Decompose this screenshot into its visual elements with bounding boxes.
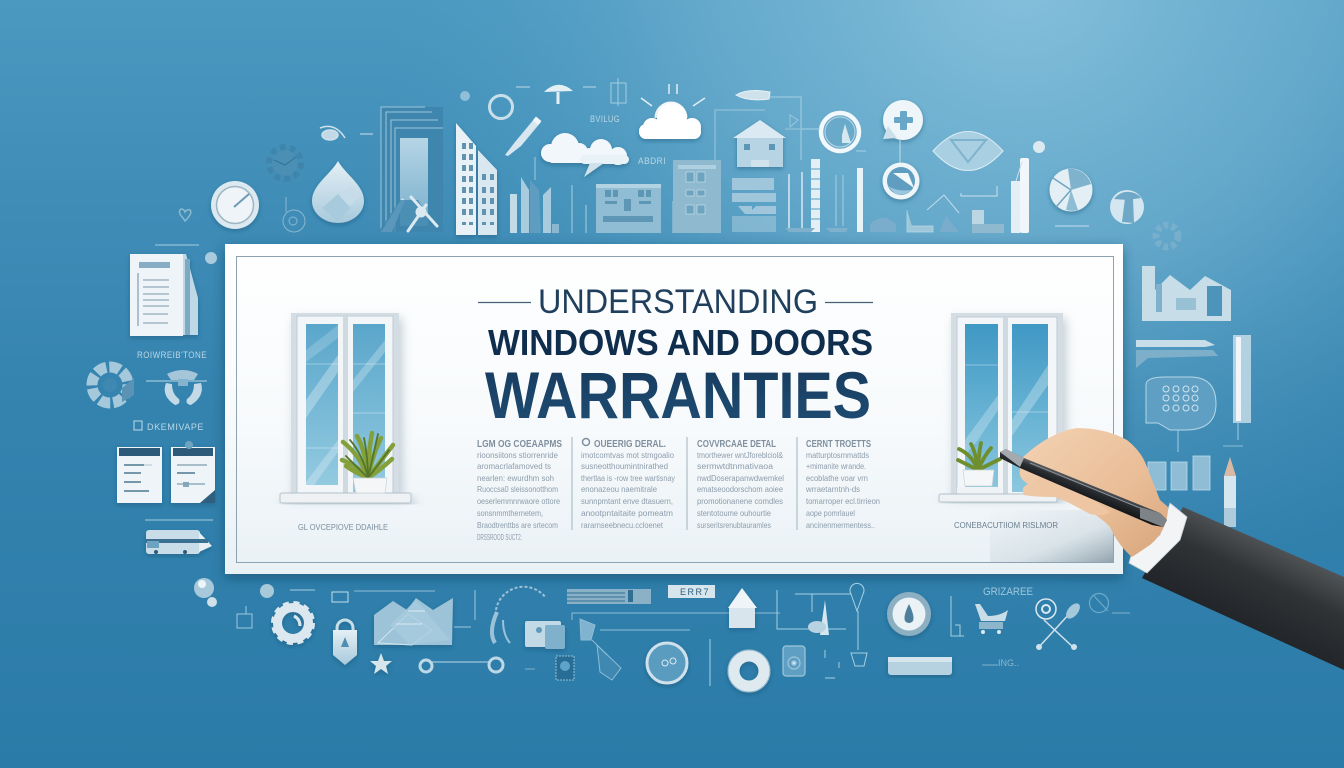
text column 2: OUEERIG DERAL. bbox=[594, 439, 666, 450]
label: ING note: ING.. bbox=[998, 658, 1019, 668]
icon: round mountain badge bbox=[1110, 190, 1144, 224]
text column 3: nwdDoserapanwdwemkel bbox=[697, 473, 784, 483]
text column 2: anootpntaitaite pomeatm bbox=[581, 508, 673, 518]
icon: outlined box bbox=[611, 78, 626, 106]
icon: chip bbox=[332, 591, 435, 602]
icon: compass badge bbox=[882, 162, 920, 200]
icon: door plan bbox=[378, 107, 443, 232]
window: right bbox=[939, 313, 1063, 502]
icon: linked tags bbox=[572, 613, 780, 680]
decorative: short rule bbox=[290, 589, 315, 591]
text column 4: wrraetarntnh-ds bbox=[805, 484, 860, 494]
text column 1: rioonsiitons stiorrenride bbox=[477, 450, 558, 460]
label: error tag: ERR7 bbox=[680, 587, 710, 597]
icon: window stack bbox=[1011, 158, 1029, 233]
caption: right window: CONEBACUTIIOM RISLMOR bbox=[954, 521, 1058, 530]
text column 4: +mimanite wrande. bbox=[806, 461, 866, 471]
icon: twin checklists bbox=[117, 447, 215, 503]
icon: small box bbox=[237, 606, 252, 628]
text column 2: susneotthoumintnirathed bbox=[581, 461, 668, 471]
icon: lifebuoy bbox=[728, 650, 770, 692]
icon: small furniture set bbox=[870, 195, 1004, 233]
text column 3: stentotoume ouhourtie bbox=[697, 508, 771, 518]
icon: server bar bbox=[567, 589, 651, 604]
icon: floor plan stack bbox=[732, 178, 776, 232]
icon: sun over cloud bbox=[639, 84, 705, 139]
icon: eye gauge bbox=[933, 132, 1003, 196]
icon: pen bbox=[505, 117, 541, 156]
label: ING note bbox=[982, 658, 1019, 668]
text column 4 bbox=[805, 439, 880, 530]
text column 3: promotionanene comdles bbox=[697, 496, 783, 506]
icon: shopping cart bbox=[975, 604, 1008, 634]
title: WARRANTIES bbox=[485, 358, 871, 432]
text column 3: surseritsrenubtauramles bbox=[697, 520, 771, 530]
text column 2: thertlaa is -row tree wartisnay bbox=[581, 473, 676, 483]
icon: pencil shelf bbox=[1136, 340, 1218, 368]
icon: house bbox=[733, 120, 786, 167]
icon: document bbox=[130, 254, 198, 336]
icon: gear bbox=[273, 603, 313, 643]
icon: delivery van bbox=[146, 530, 212, 554]
title: UNDERSTANDING bbox=[538, 283, 818, 321]
icon: tall building bbox=[456, 123, 497, 235]
icon: measuring bars bbox=[785, 159, 863, 232]
text column 3: sermwtdtnmativaoa bbox=[697, 461, 773, 471]
icon: ring bbox=[490, 96, 512, 118]
icon group: bottom row of icons bbox=[194, 578, 1130, 692]
icon: apartment block bbox=[596, 184, 673, 233]
icon: paper clip connector bbox=[185, 441, 193, 449]
icon: dark gear bbox=[269, 147, 301, 179]
icon: handshake emblem bbox=[146, 370, 207, 405]
decorative: connector bbox=[454, 590, 475, 627]
decorative: line above document bbox=[155, 244, 199, 246]
text column 1: Ruoccsa0 sleissonotthom bbox=[477, 484, 558, 494]
icon: padlock bbox=[333, 620, 357, 665]
icon: small heart bbox=[179, 209, 191, 221]
icon: folder and tablet bbox=[525, 621, 565, 649]
icon: building panel bbox=[1142, 266, 1231, 321]
icon: foam block bbox=[888, 657, 952, 675]
icon: small blob bbox=[1033, 141, 1045, 153]
icon: city skyline bbox=[510, 157, 586, 233]
title: WINDOWS AND DOORS bbox=[488, 322, 873, 363]
text column 2: rararnseebnecu.ccloenet bbox=[581, 520, 664, 530]
icon: blue person badge bbox=[556, 656, 574, 680]
icon: office building bbox=[673, 160, 721, 233]
icon: pie dial bbox=[1050, 168, 1092, 212]
icon: pliers bbox=[408, 197, 437, 231]
icon: keypad speech bubble bbox=[1146, 377, 1216, 452]
text column 4: ancinenmermentess.. bbox=[806, 520, 875, 530]
text column 1: aromacrlafamoved ts bbox=[477, 461, 551, 471]
text column 1 bbox=[477, 439, 562, 542]
icon: cog with shield bbox=[92, 367, 134, 403]
text column 4: CERNT TROETTS bbox=[806, 439, 871, 450]
text column 3: ematseoodorschom aoiee bbox=[697, 484, 783, 494]
text column 2 bbox=[581, 438, 676, 530]
text column 1: oeserlemmnrwaore ottore bbox=[477, 496, 560, 506]
icon: vertical ruler bbox=[1223, 335, 1251, 446]
thumb bbox=[1036, 478, 1110, 515]
icon: bubbles bbox=[194, 578, 274, 607]
decorative: L rule bbox=[951, 596, 964, 636]
icon: faded no-sign bbox=[1090, 594, 1130, 613]
pen bbox=[1000, 449, 1167, 527]
hand holding pen bbox=[1000, 428, 1344, 670]
icon: thermostat dial bbox=[647, 643, 687, 683]
decorative: dial baseline bbox=[1055, 225, 1089, 227]
text column 1: DRSSROOD SUCT2. bbox=[477, 532, 522, 542]
icon: map fold bbox=[374, 598, 453, 645]
shirt cuff bbox=[1129, 503, 1187, 573]
text column 4: ecoblathe voar vrn bbox=[806, 473, 868, 483]
icon: plus bubble bbox=[883, 100, 923, 140]
icon: umbrella bbox=[516, 85, 596, 104]
icon: teardrop sketch bbox=[808, 600, 829, 635]
text column 1: sonsnmmthernetem, bbox=[477, 508, 543, 518]
icon group: right column of icons bbox=[1136, 266, 1251, 527]
arm sleeve bbox=[1142, 507, 1344, 670]
icon: connector bbox=[899, 140, 901, 163]
text column 2: imotcomtvas mot stmgoalio bbox=[581, 450, 674, 460]
window: left bbox=[280, 313, 411, 503]
text column 1: Braodtrenttbs are srtecom bbox=[477, 520, 558, 530]
label: error tag bbox=[668, 585, 715, 598]
text column 3 bbox=[697, 439, 784, 530]
label: right bottom note: GRIZAREE bbox=[983, 586, 1033, 598]
text column 4: tomarroper ecl.tirrieon bbox=[806, 496, 880, 506]
text column 4: aope pomrlauel bbox=[806, 508, 855, 518]
icon: fingerprint swirl bbox=[320, 126, 373, 140]
label: address note: ABDRI bbox=[638, 156, 666, 166]
decorative: rule bbox=[145, 519, 213, 521]
text column 1: LGM OG COEAAPMS bbox=[477, 439, 562, 450]
icon: pill tag bbox=[736, 91, 801, 160]
text column 3: COVVRCAAE DETAL bbox=[697, 439, 776, 450]
icon: inspection ring bbox=[801, 113, 866, 151]
icon: small swirl badge bbox=[460, 91, 470, 101]
plant on left sill bbox=[342, 433, 393, 493]
icon: plumb line drawing bbox=[777, 583, 867, 678]
text column 1: nearlen: ewurdhm soh bbox=[477, 473, 554, 483]
icon: small tiles bbox=[1148, 456, 1210, 490]
label: building note: BVILUG bbox=[590, 114, 620, 124]
icon group: top row of icons bbox=[211, 78, 1178, 247]
icon: thin frame lines bbox=[715, 110, 800, 160]
icon: water drop bbox=[312, 161, 364, 223]
text column 4: matturptosrnmattds bbox=[806, 450, 869, 460]
text column 3: tmorthewer wntJforeblciol& bbox=[697, 450, 783, 460]
decorative: divider bbox=[709, 639, 711, 686]
icon: swirl tokens bbox=[420, 658, 535, 672]
panel: central warranty card bbox=[225, 244, 1123, 574]
plant on right sill bbox=[957, 443, 1002, 493]
icon: house outline block bbox=[728, 588, 757, 628]
icon: water dial bbox=[887, 592, 931, 636]
icon: crossed tools bbox=[1036, 599, 1083, 650]
icon: small shield bbox=[205, 252, 217, 264]
icon: small ring with line bbox=[283, 197, 305, 232]
icon: pencil bbox=[1224, 457, 1236, 527]
icon: hair arc bbox=[492, 587, 546, 643]
label: left note two: DKEMIVAPE bbox=[147, 422, 204, 432]
text column 2: enonazeou naemitrale bbox=[581, 484, 657, 494]
icon: star bbox=[370, 653, 392, 674]
hand bbox=[1020, 428, 1168, 557]
caption: left window: GL OVCEPIOVE DDAIHLE bbox=[298, 523, 388, 532]
icon: speaker card bbox=[783, 646, 805, 676]
icon: clock dial bbox=[211, 181, 259, 229]
label: left note one: ROIWREIB'TONE bbox=[137, 350, 207, 360]
title bbox=[478, 283, 873, 432]
text column 2: sunnpmtant enve dtasuern, bbox=[581, 496, 673, 506]
icon: twin clouds with pen bbox=[541, 133, 629, 177]
icon: faded gear bbox=[1156, 225, 1178, 247]
icon group: left column of icons bbox=[92, 209, 217, 554]
